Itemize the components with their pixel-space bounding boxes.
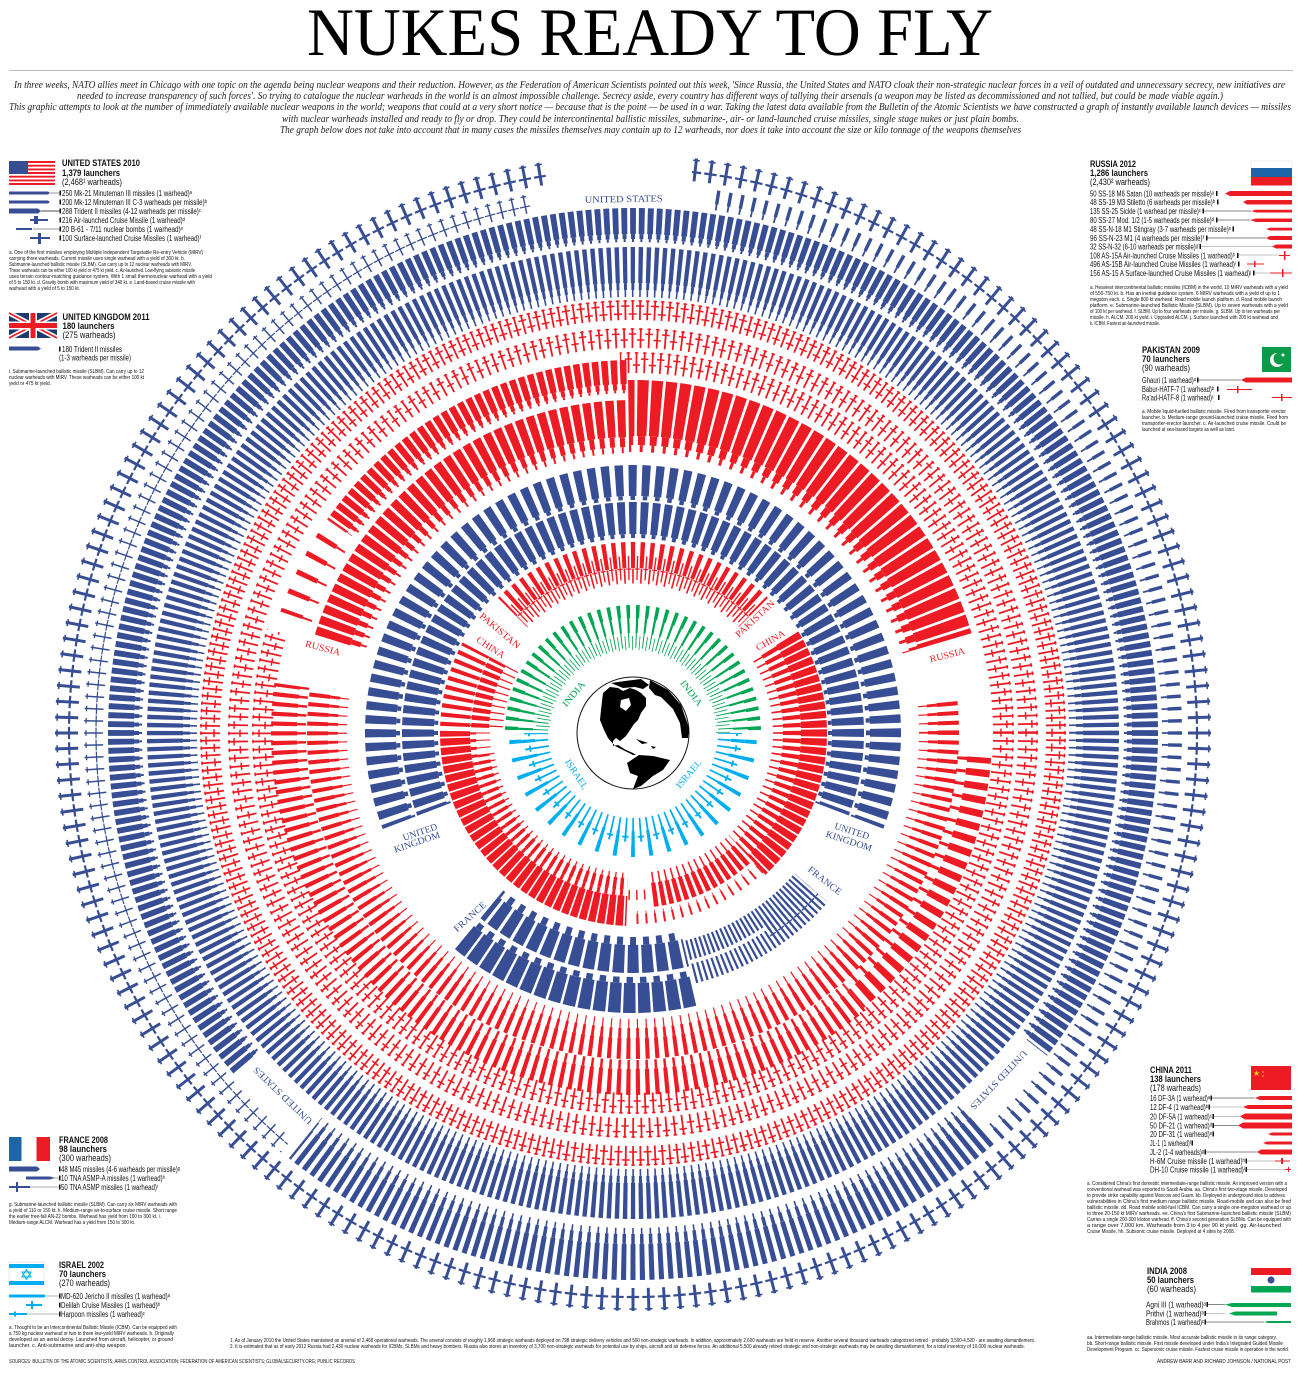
notes: China (1087, 1181, 1291, 1235)
byline: ANDREW BARR AND RICHARD JOHNSON / NATIONAL POST (1157, 1359, 1291, 1365)
chart labels: KINGDOM (824, 830, 874, 854)
panel: United States: 20 B-61 - 7/11 nuclear bombs (1 warhead)ᵉ (62, 225, 183, 234)
panel: China: 20 DF-5A (1 warhead)ᶜ (1150, 1112, 1212, 1122)
ring: Russia cruise middle (229, 329, 1037, 1137)
notes: Pakistan (1142, 409, 1288, 433)
panel: Russia (1090, 159, 1292, 327)
panel: United Kingdom: UNITED KINGDOM 2011 (62, 312, 150, 323)
panel: Russia: 1,286 launchers (1090, 168, 1148, 179)
chart labels: CHINA (755, 629, 787, 654)
ring: US thin missiles right (714, 190, 1182, 1140)
notes: US: uses terrain contour-matching guidance system. With 1 small thermonuclear warhead with a yield (9, 274, 212, 280)
notes: US: of 5 to 150 kt. d. Gravity bomb with maximum yield of 340 kt. e. Land-based cruise missile with (9, 280, 195, 286)
panel: China (1087, 1065, 1292, 1235)
footnotes: 1. As of January 2010 the United States maintained an arsenal of 2,468 operational warheads. The arsenal consists of roughly 1,968 strategic warheads deployed on 798 strategic delivery vehicles and 500 non-strategic warheads. In addition, approximately 2,600 warheads are held in reserve. Another several thousand warheads categorized retired - probably 3,500-4,500 - are awaiting dismantlement. (230, 1338, 1035, 1344)
ring: Israel (515, 615, 751, 851)
flag: France (9, 1137, 50, 1161)
panel: China: JL-1 (1 warhead)ᶠ (1150, 1139, 1191, 1148)
chart labels (252, 194, 1028, 1126)
notes: US: a. One of the first missiles employing Multiple Independent Targetable Re-entry Vehicle (MIRV) (9, 250, 203, 256)
notes: China: Cruise Missile. hh. Subsonic cruise missile. Deployed at 4 sites by 2008. (1087, 1229, 1235, 1235)
notes: France (9, 1202, 177, 1226)
ring: India (512, 612, 754, 854)
ring: US Trident fat row (108, 208, 1158, 1074)
ring: US thin bombs left (84, 195, 530, 1152)
panel: India: Prithvi (1 warhead)ᵇ (1146, 1310, 1204, 1318)
flag: Pakistan (1262, 347, 1291, 372)
chart labels: UNITED (402, 822, 439, 844)
footnotes (230, 1338, 1035, 1350)
panel: Russia: (2,430² warheads) (1090, 177, 1150, 188)
panel: Russia: 156 AS-15 A Surface-launched Cruise Missiles (1 warhead)ʲ (1090, 269, 1251, 278)
panel: United Kingdom (9, 312, 150, 387)
notes: US: Submarine-launched ballistic missile (SLBM). Can carry up to 12 nuclear warheads with MIRV. (9, 262, 192, 268)
panel: Russia: 48 SS-19 M3 Stiletto (6 warheads per missile)ᵇ (1090, 198, 1215, 207)
chart labels: INDIA (677, 679, 704, 709)
notes: UK (9, 369, 145, 387)
notes: UK: yield or 475 kt yield. (9, 381, 51, 387)
notes: China: ballistic missile. dd. Road mobile solid-fuel ICBM. Can carry a single one-megaton warhead or up (1087, 1205, 1291, 1211)
flag: Israel (9, 1262, 44, 1287)
chart labels: FRANCE (805, 865, 843, 898)
panel: France: 10 TNA ASMP-A missiles (1 warhead)ʰ (61, 1174, 165, 1183)
notes: US: warhead with a yield of 5 to 150 kt. (9, 286, 80, 292)
intro text: with nuclear warheads installed and ready to fly or drop. They could be intercontinental ballistic missiles, submarine-, air- or land-launched cruise missiles, single stage nukes or just plain bombs. (282, 114, 1019, 125)
notes: Israel: developed as an aerial decoy. Launched from aircraft, helicopter, or ground (9, 1337, 173, 1343)
panel: Pakistan (1142, 345, 1292, 433)
panel: China: CHINA 2011 (1150, 1065, 1193, 1076)
notes: India (1087, 1335, 1289, 1353)
panel: Pakistan: Ghauri (1 warhead)ᵃ (1142, 376, 1197, 385)
notes: Pakistan: a. Mobile liquid-fuelled ballistic missile. Fired from transporter erector (1142, 409, 1286, 415)
panel: United States: 200 Mk-12 Minuteman III C-3 warheads per missile)ᵇ (62, 198, 207, 207)
panel: United States: UNITED STATES 2010 (62, 158, 140, 169)
legend icons: Israel missiles (9, 1294, 46, 1316)
panel: United Kingdom: (1-3 warheads per missile) (59, 354, 131, 362)
panel: Pakistan: 70 launchers (1142, 354, 1190, 365)
ring: US outer winged missiles (57, 157, 1209, 1309)
ring: China right (728, 632, 827, 875)
panel: Russia: RUSSIA 2012 (1090, 159, 1136, 170)
notes: Russia (1090, 285, 1288, 327)
chart labels: UNITED (833, 822, 870, 842)
panel: Pakistan: Ra'ad-HATF-8 (1 warhead)ᶜ (1142, 394, 1214, 402)
chart labels: KINGDOM (393, 830, 442, 856)
panel: Israel: 70 launchers (59, 1269, 106, 1280)
ring: Russia long inner lower (307, 692, 959, 1059)
notes: US (9, 250, 212, 292)
panel: United States: (2,468¹ warheads) (62, 177, 122, 188)
notes: US: carrying three warheads. Current missile uses single warhead with a yield of 300 kt. b. (9, 256, 185, 262)
panel: China: (178 warheads) (1150, 1083, 1201, 1094)
panel: China: 138 launchers (1150, 1074, 1201, 1085)
panel: Israel: Delilah Cruise Missiles (1 warhead)ᵇ (61, 1301, 160, 1310)
notes: Russia: megaton each. c. Single 800 kt warhead. Road mobile launch platform. d. Road mobile launch (1090, 297, 1282, 303)
notes: China: to three 20-150 kt MIRV warheads. ee. China's first Submarine-launched ballistic missile (SLBM) (1087, 1211, 1291, 1217)
ring: China left outer fat (440, 733, 628, 926)
ring: Pakistan (498, 542, 768, 628)
panel: Russia: 48 SS-N-18 M1 Stingray (3-7 warheads per missile)ᵉ (1090, 225, 1231, 234)
notes: Israel: launcher. c. Anti-submarine and anti-ship weapon. (9, 1343, 127, 1349)
ring: Russia fat ICBM upper right (628, 380, 972, 654)
panel: Russia: 135 SS-25 Sickle (1 warhead per missile)ᶜ (1090, 207, 1201, 216)
ring: China lower (648, 838, 752, 907)
ring: China tiny left (483, 583, 783, 883)
notes: France: the earlier free-fall AN-22 bombs. Warhead has yield from 100 to 300 kt. i. (9, 1214, 161, 1220)
legend icons: China missiles (1238, 1096, 1292, 1172)
chart labels: UNITED STATES (585, 194, 663, 206)
panel: United States (9, 158, 212, 292)
notes: China: a range over 7,000 km. Warheads from 3 to 4 per 90 kt yield. gg. Air-launched (1087, 1223, 1281, 1229)
ring: France winged section (762, 882, 818, 937)
panel: Russia: 108 AS-15A Air-launched Cruise Missiles (1 warhead)ʰ (1090, 252, 1235, 260)
ring: China upper left inner (480, 580, 786, 886)
notes: Russia: of 550-750 kt. b. Has an inertial guidance system. 6 MIRV warheads with a yield of up to 1 (1090, 291, 1280, 297)
intro text: needed to increase transparency of such forces'. So trying to catalogue the nuclear warheads in the world is an almost impossible challenge. Secrecy aside, every country has different ways of tallying their arsenals (a weapon may be listed as decommissioned and not tallied, but could be made viable again.) (77, 91, 1224, 102)
panel: France (9, 1135, 180, 1226)
notes: UK: i. Submarine-launched ballistic missile (SLBM). Can carry up to 12 (9, 369, 144, 375)
notes: Pakistan: transporter-erector launcher. c. Air-launched cruise missile. Could be (1142, 421, 1286, 427)
panel: China: DH-10 Cruise missile (1 warhead)ⁱ (1150, 1166, 1245, 1174)
icon: Trident (9, 346, 41, 350)
notes: France: a yield of 110 or 150 kt. h. Medium-range air-to-surface cruise missile. Short range (9, 1208, 177, 1214)
notes: France: g. Submarine-launched ballistic missile (SLBM). Can carry six MIRV warheads with (9, 1202, 177, 1208)
panel: United States: 216 Air-launched Cruise Missile (1 warhead)ᵈ (62, 216, 185, 225)
ring: Russia long outer lower (271, 682, 866, 1095)
notes: Russia: a. Heaviest intercontinental ballistic missiles (ICBM) in the world, 10 MIRV warheads with a yield (1090, 285, 1288, 291)
notes: China: conventional warhead was exported to Saudi Arabia. aa. China's first two-stage missile. Developed (1087, 1187, 1287, 1193)
panel: China: 50 DF-21 (1 warhead)ᵈ (1150, 1122, 1212, 1130)
panel: France: FRANCE 2008 (59, 1135, 108, 1146)
notes: UK: nuclear warheads with MIRV. These warheads can be either 100 kt (9, 375, 145, 381)
panel: China: H-6M Cruise missile (1 warhead)ʰ (1150, 1157, 1245, 1166)
ring: UK Trident two rows (365, 465, 901, 829)
panel: United Kingdom: 180 Trident II missiles (62, 345, 122, 354)
panel: United States: 1,379 launchers (62, 168, 120, 179)
ring: France M45 fat rows (455, 890, 696, 1013)
chart labels: ISRAEL (675, 758, 704, 791)
ring: US Minuteman row (165, 265, 1101, 1201)
panel: Pakistan: PAKISTAN 2009 (1142, 345, 1200, 356)
panel: United Kingdom: (275 warheads) (62, 330, 116, 341)
flag: India (1251, 1268, 1291, 1292)
panel: Israel: Harpoon missiles (1 warhead)ᶜ (61, 1310, 145, 1319)
panel: India: Agni III (1 warhead)ᵃ (1146, 1300, 1207, 1310)
ring: Russia upper left inner (314, 400, 626, 648)
notes: Russia: missile. h. ALCM. 200 kt yield. i. Upgraded ALCM. j. Surface launched with 200 kt warhead and (1090, 315, 1278, 321)
panel: United Kingdom: 180 launchers (62, 321, 114, 332)
notes: US: These warheads can be either 100 kt yield or 475 kt yield. c. Air-launched. Low-flying subsonic missile (9, 268, 195, 274)
panel: Israel: (270 warheads) (59, 1278, 110, 1289)
notes: India: bb. Short-range ballistic missile. First missile developed under India's Integrated Guided Missile (1087, 1341, 1283, 1347)
notes: Russia: k. ICBM. Fastest air-launched missile. (1090, 321, 1160, 327)
notes: Israel (9, 1325, 177, 1349)
ring: Russia upper left outer (328, 360, 627, 536)
panel: United States: 100 Surface-launched Cruise Missiles (1 warhead)ᶠ (62, 234, 201, 243)
ring: Russia cruise inner (253, 353, 1013, 1113)
panel: France: 48 M45 missiles (4-6 warheads per missile)ᵍ (61, 1165, 180, 1174)
ring: Russia upper left sparse (280, 519, 346, 622)
chart labels: PAKISTAN (734, 599, 777, 640)
chart labels: PAKISTAN (477, 612, 522, 651)
chart labels: INDIA (561, 680, 588, 709)
globe (577, 677, 689, 789)
footnotes: 2. It is estimated that as of early 2012 Russia had 2,430 nuclear warheads for ICBMs, SLBMs and heavy bombers. Russia also stores an inventory of 3,700 non-strategic warheads for potential use by ships, aircraft and air defense forces. An additional 5,500 already retired strategic and non-strategic warheads may be awaiting dismantlement, for a total inventory of 10,000 nuclear warheads. (230, 1344, 1025, 1350)
panel: Russia: 50 SS-18 M6 Satan (10 warheads per missile)ᵃ (1090, 190, 1215, 198)
chart labels: RUSSIA (929, 647, 966, 665)
panel: United States: 250 Mk-21 Minuteman III missiles (1 warhead)ᵃ (62, 189, 193, 198)
panel: Russia: 496 AS-15B Air-launched Cruise Missiles (1 warhead)ⁱ (1090, 260, 1236, 269)
legend icons: US missiles (9, 192, 50, 244)
panel: China: JL-2 (1-4 warheads)ᵍ (1150, 1148, 1204, 1157)
panel: India: (60 warheads) (1147, 1284, 1196, 1295)
notes: Israel: a 750 kg nuclear warhead or two to three low-yield MIRV warheads. b. Originally (9, 1331, 174, 1337)
radial missile chart (57, 157, 1209, 1309)
flag: UK (9, 313, 57, 338)
ring: Russia sparse fat right (842, 756, 992, 1008)
panel: Russia: 80 SS-27 Mod. 1/2 (1-5 warheads per missile)ᵈ (1090, 216, 1214, 225)
panel: Pakistan: Babur-HATF-7 (1 warhead)ᵇ (1142, 385, 1214, 394)
chart labels: FRANCE (452, 900, 489, 935)
panel: United States: 288 Trident II missiles (4-12 warheads per missile)ᶜ (62, 207, 201, 216)
panel: Israel (9, 1260, 177, 1349)
source line: SOURCES: BULLETIN OF THE ATOMIC SCIENTISTS; ARMS CONTROL ASSOCIATION; FEDERATION OF AMERICAN SCIENTISTS; GLOBALSECURITY.ORG; PUBLIC RECORDS (9, 1359, 356, 1365)
notes: China: vulnerabilities in China's first medium range ballistic missile. Road-mobile and can also be fired (1087, 1199, 1291, 1205)
panel: Israel: MD-620 Jericho II missiles (1 warhead)ᵃ (61, 1292, 171, 1301)
notes: Israel: a. Thought to be an Intercontinental Ballistic Missile (ICBM). Can be equipped with (9, 1325, 177, 1331)
legend icons: Pakistan missiles (1227, 378, 1292, 401)
legend icons: France missiles (9, 1166, 55, 1192)
flag: Russia (1251, 161, 1292, 186)
ring: US long missiles lower (288, 1106, 994, 1280)
flag: USA (9, 161, 55, 185)
ring: China small lower outer (630, 863, 764, 924)
flag: China (1251, 1066, 1291, 1090)
panel: Russia: 96 SS-N-23 M1 (4 warheads per missile)ᶠ (1090, 234, 1204, 243)
panel: China: 12 DF-4 (1 warhead)ᵇ (1150, 1103, 1208, 1112)
ring: France thin rows (683, 874, 828, 984)
panel: France: 50 TNA ASMP missiles (1 warhead)ⁱ (61, 1183, 158, 1192)
panel: France: (300 warheads) (59, 1153, 111, 1164)
intro text (9, 80, 1291, 136)
ring: China upper left outer thin (440, 642, 494, 733)
notes: Pakistan: launcher. b. Medium-range ground-launched cruise missile. Fired from (1142, 415, 1288, 421)
panel: Pakistan: (90 warheads) (1142, 363, 1190, 374)
chart labels: UNITED STATES (967, 1048, 1028, 1111)
panel: India: INDIA 2008 (1147, 1266, 1187, 1277)
ring: Russia cruise outer (201, 301, 1065, 1165)
intro text: The graph below does not take into account that in many cases the missiles themselves may contain up to 12 warheads, nor does it take into account the size or kilo tonnage of the weapons themselves (280, 125, 1021, 136)
panel: China: 16 DF-3A (1 warhead)ᵃ (1150, 1094, 1211, 1103)
flag: China: ★ (1253, 1069, 1260, 1078)
ring: China tiny bottom (628, 890, 646, 900)
panel: France: 98 launchers (59, 1144, 107, 1155)
panel: India: 50 launchers (1147, 1275, 1194, 1286)
notes: Russia: platform. e. Submarine-launched Ballistic Missile (SLBM). Up to seven warheads with a yield (1090, 303, 1288, 309)
chart labels: UNITED STATES (252, 1064, 315, 1126)
notes: Pakistan: launched at sea-based targets as well as land. (1142, 427, 1235, 433)
chart labels: ISRAEL (562, 758, 589, 792)
panel: Russia: 32 SS-N-32 (6-10 warheads per missile)ᵍ (1090, 242, 1198, 252)
panel: Israel: ISRAEL 2002 (59, 1260, 104, 1271)
chart labels: RUSSIA (304, 640, 341, 659)
panel: India: Brahmos (1 warhead)ᶜ (1146, 1318, 1204, 1327)
notes: France: Medium-range ALCM. Warhead has a yield from 150 to 300 kt. (9, 1220, 135, 1226)
notes: India: aa. Intermediate-range ballistic missile. Most accurate ballistic missile in its range category. (1087, 1335, 1277, 1341)
ring: China left inner (478, 752, 628, 890)
legend icons: Russia missiles (1225, 191, 1292, 277)
legend icons: India missiles (1225, 1303, 1291, 1323)
panel: India (1087, 1266, 1291, 1353)
panel: China: 20 DF-31 (1 warhead)ᵉ (1150, 1130, 1212, 1139)
chart labels: CHINA (474, 635, 506, 661)
